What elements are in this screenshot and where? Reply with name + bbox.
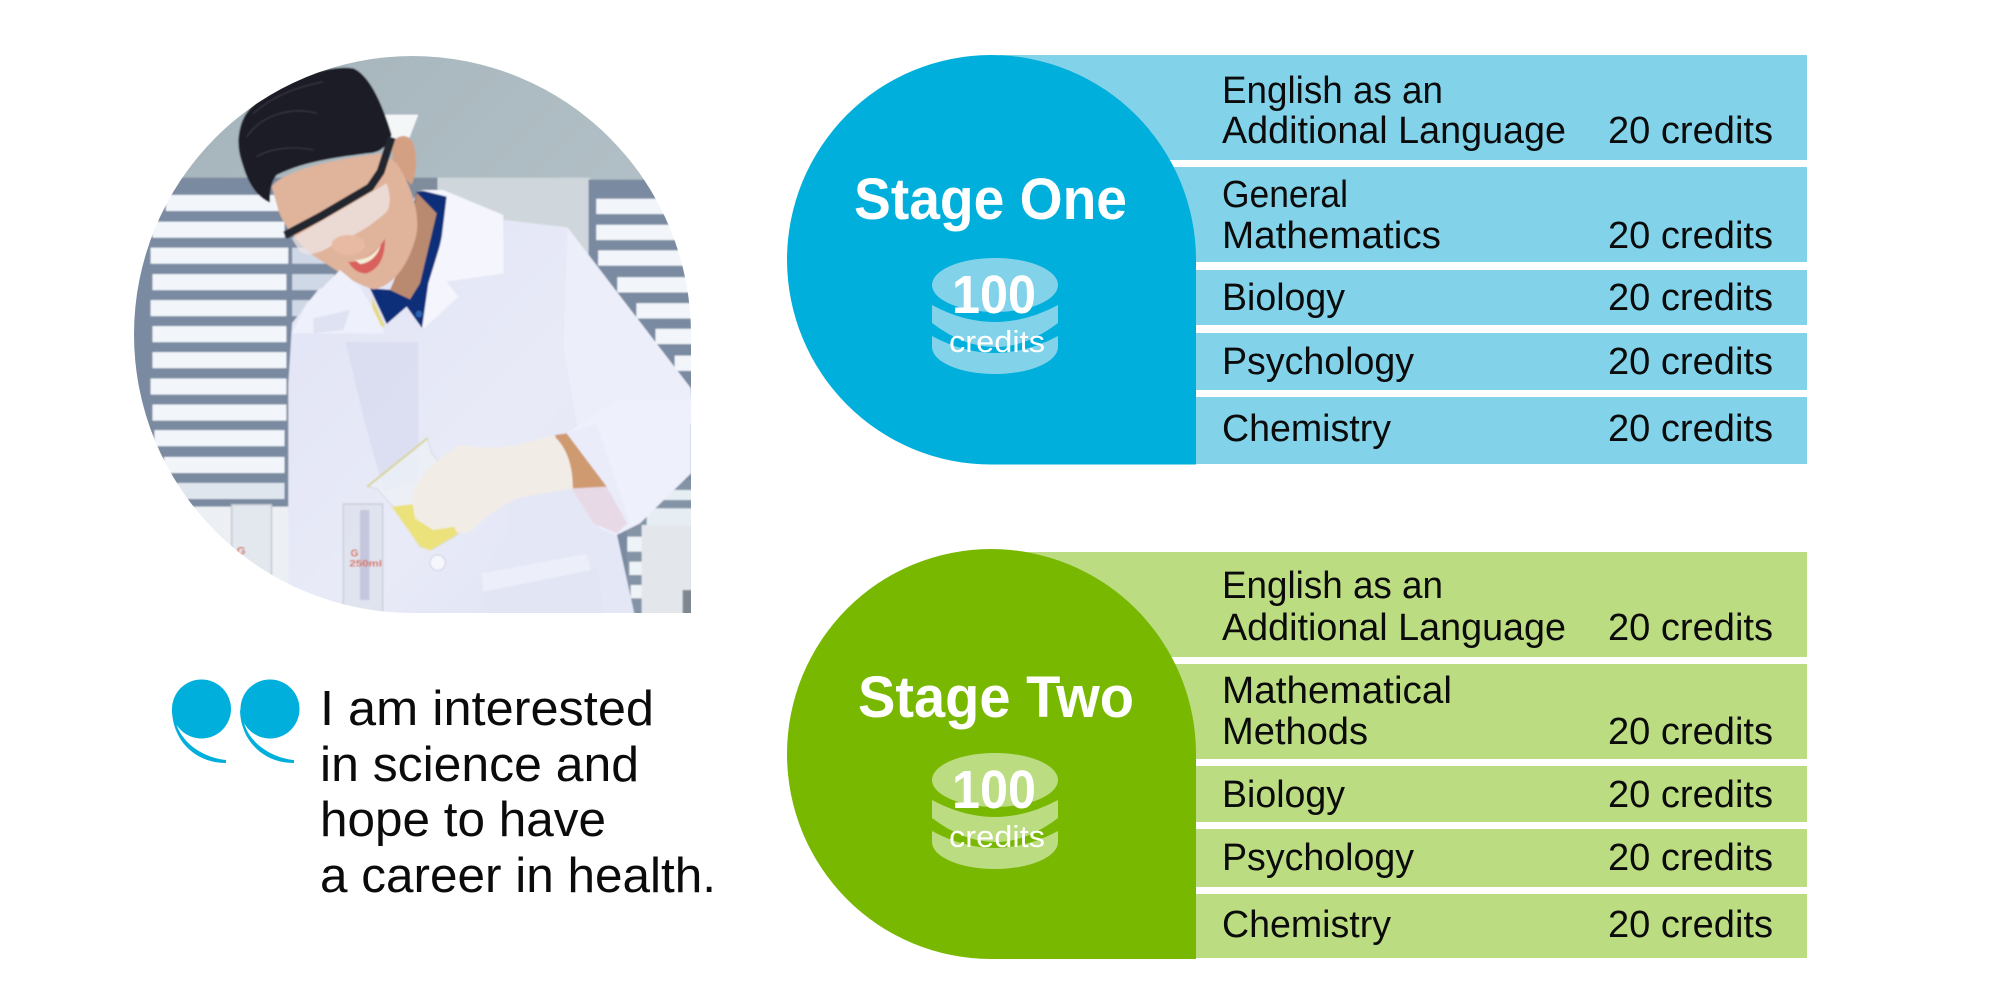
stage two credits total: credits (949, 819, 1045, 854)
stage two subject list: Mathematical (1222, 670, 1452, 712)
stage two subject list: 20 credits (1608, 607, 1773, 649)
stage one credits total: 100 (952, 265, 1036, 325)
stage two credits total: 100 (952, 760, 1036, 820)
sleeve (602, 424, 691, 536)
stage one subject list: Chemistry (1222, 408, 1391, 450)
collar left (292, 270, 385, 333)
icon: stack of credits, stage one (932, 258, 1058, 374)
polo shirt (370, 190, 447, 330)
stage one credits total: credits (949, 324, 1045, 359)
nose (331, 234, 352, 246)
stage two subject list: 20 credits (1608, 837, 1773, 879)
stage two subject list: 20 credits (1608, 904, 1773, 946)
quote text: I am interested (320, 682, 654, 736)
icon: stack of credits, stage two (932, 753, 1058, 869)
head and upper body detail (238, 68, 503, 333)
panel: Stage Two (787, 549, 1807, 959)
stage one subject list: 20 credits (1608, 110, 1773, 152)
quote text: hope to have (320, 793, 606, 847)
stage one subject list: 20 credits (1608, 341, 1773, 383)
coat button (430, 555, 445, 570)
stage two subject list (1222, 565, 1773, 946)
graduated cylinder: G (351, 549, 359, 560)
mouth (348, 238, 385, 273)
stage one semicircle (787, 55, 1196, 464)
stage one subject list (1222, 70, 1773, 450)
button (416, 311, 422, 317)
photo: student pouring liquid in a laboratory (134, 56, 691, 613)
stage two subject list: Biology (1222, 774, 1345, 816)
stage two subject list: 20 credits (1608, 711, 1773, 753)
stage two subject list: Chemistry (1222, 904, 1391, 946)
stage two heading: Stage Two (858, 665, 1134, 730)
stage two subject list: 20 credits (1608, 774, 1773, 816)
quote text: a career in health. (320, 849, 716, 903)
stage two subject list: Additional Language (1222, 607, 1566, 649)
glove (412, 436, 573, 533)
coat pocket (504, 586, 505, 587)
graduated cylinder (343, 504, 383, 617)
stage two subject list: English as an (1222, 565, 1443, 607)
stage two semicircle (787, 549, 1196, 959)
stage two subject list: Psychology (1222, 837, 1414, 879)
stage one subject list: General (1222, 174, 1348, 216)
stage one credits total (949, 265, 1045, 359)
left graduated cylinder (230, 503, 273, 575)
quote text (320, 682, 716, 903)
safety glasses frame (285, 137, 392, 235)
left graduated cylinder: G (237, 545, 246, 557)
background right of coat (627, 480, 693, 617)
quote text: in science and (320, 738, 639, 792)
stage one subject list: Additional Language (1222, 110, 1566, 152)
forearm (555, 433, 607, 488)
lab coat (288, 191, 694, 618)
stage one subject list: English as an (1222, 70, 1443, 112)
stage one heading: Stage One (854, 167, 1127, 232)
face (272, 153, 417, 289)
ear (392, 136, 416, 185)
right blinds (588, 179, 691, 578)
stage two credits total (949, 760, 1045, 854)
beaker (366, 437, 460, 552)
icon: quotation marks (172, 680, 300, 763)
stage one subject list: Mathematics (1222, 215, 1441, 257)
hair (238, 68, 392, 203)
coat body below arm (616, 536, 636, 613)
stage one subject list: 20 credits (1608, 408, 1773, 450)
stage one subject list: 20 credits (1608, 277, 1773, 319)
safety glasses lens (292, 183, 390, 254)
collar right (420, 190, 503, 331)
panel: Stage One (787, 55, 1807, 464)
stage one subject list: Psychology (1222, 341, 1414, 383)
neck (390, 193, 437, 299)
stage one subject list: Biology (1222, 277, 1345, 319)
stage two subject rows (1000, 552, 1807, 958)
stage two subject list: Methods (1222, 711, 1368, 753)
stage one subject rows (1000, 55, 1807, 464)
left blinds (134, 177, 335, 584)
stage one subject list: 20 credits (1608, 215, 1773, 257)
lower photo detail: hand, beaker, cuff, pocket (343, 400, 693, 617)
graduated cylinder: 250ml (349, 559, 382, 569)
